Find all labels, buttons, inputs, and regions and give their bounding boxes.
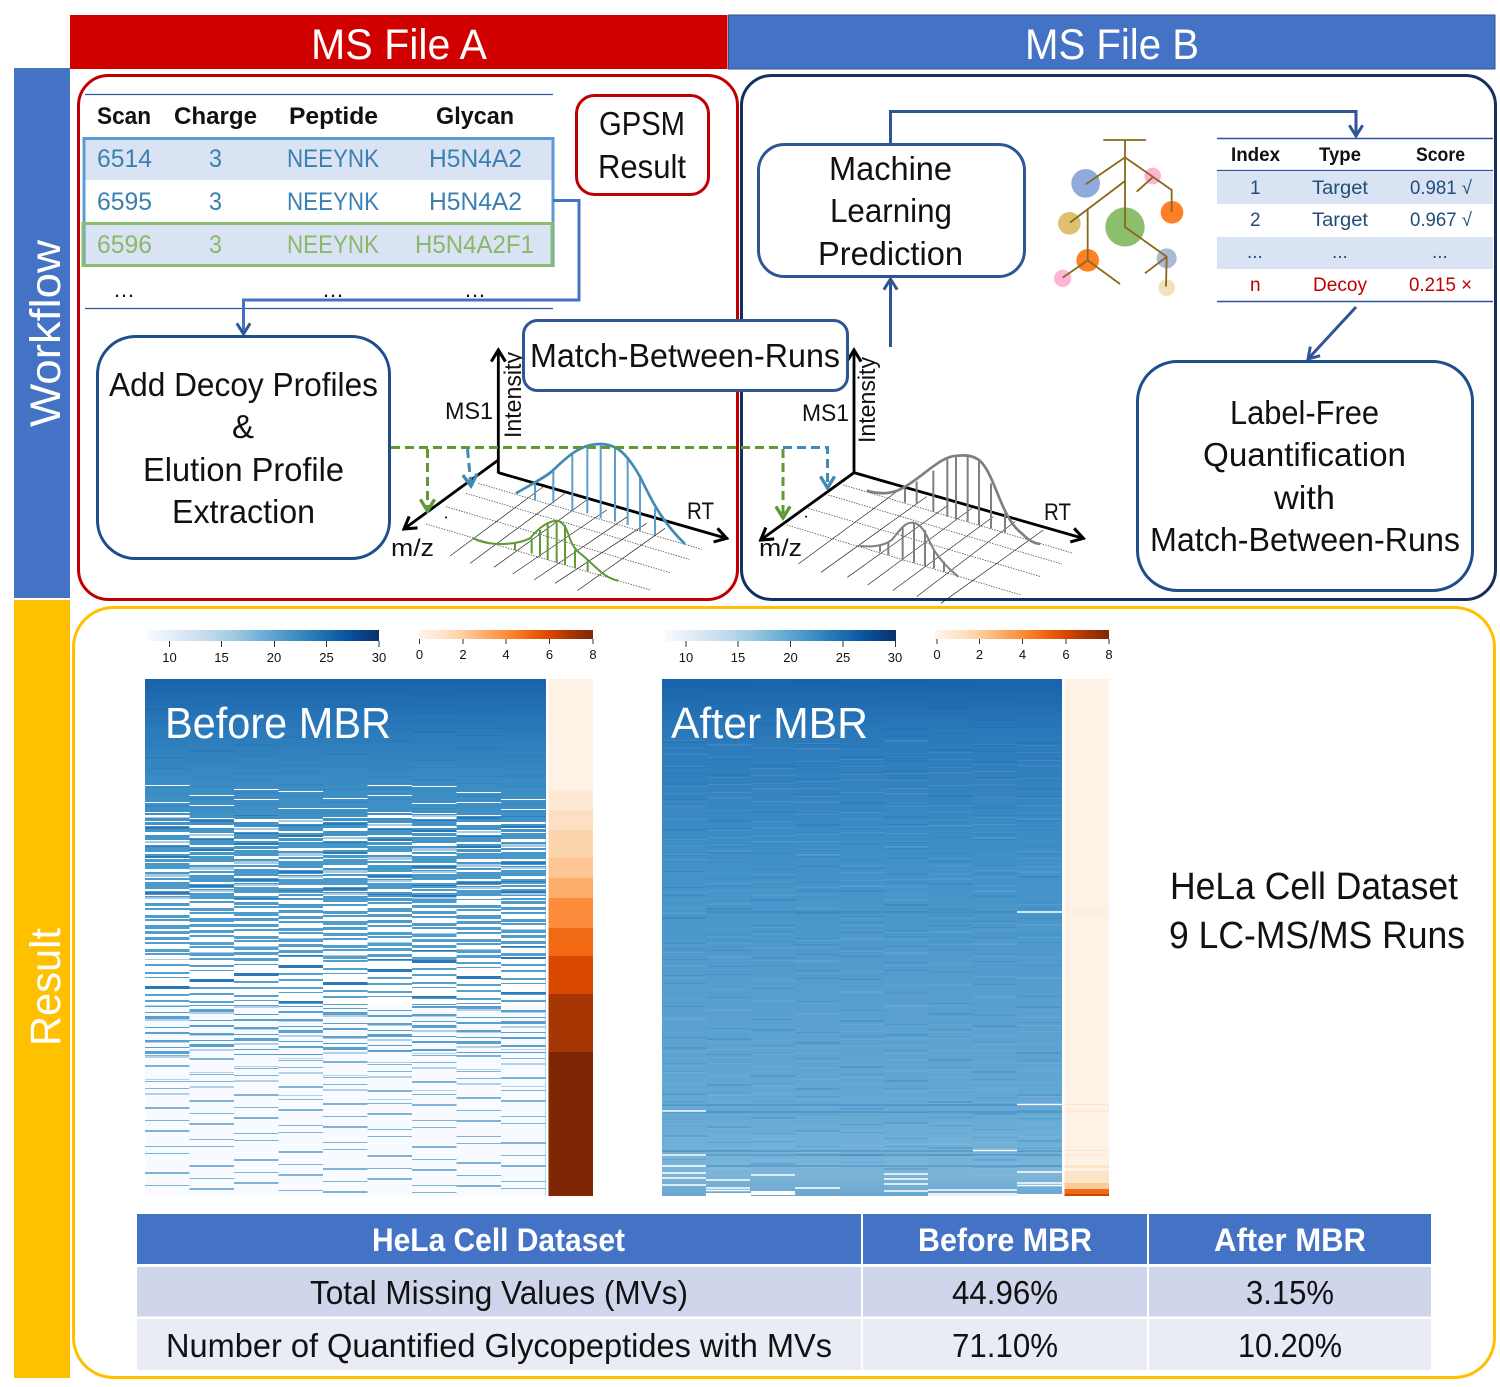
score table xyxy=(1217,138,1493,302)
colorbar: intensity before MBR: 15 xyxy=(214,650,229,665)
heatmap: after MBR: After MBR xyxy=(671,699,868,748)
chart: MS1 3D elution profile in file B xyxy=(759,350,1083,603)
colorbar: intensity after MBR: 15 xyxy=(731,650,745,665)
GPSM result box xyxy=(576,96,708,194)
colorbar: intensity before MBR: 30 xyxy=(372,650,386,665)
chart: MS1 3D elution profile in file A: RT xyxy=(687,498,714,525)
Machine Learning Prediction box xyxy=(758,144,1024,276)
score table: n xyxy=(1250,275,1261,296)
score table: Target xyxy=(1312,178,1369,199)
icon: decision tree xyxy=(1054,140,1183,296)
GPSM table: ... xyxy=(465,277,485,302)
GPSM table: NEEYNK xyxy=(287,231,379,259)
panel: MS File B workflow xyxy=(742,76,1496,600)
GPSM table: H5N4A2 xyxy=(429,145,522,173)
heatmap: after MBR xyxy=(662,679,1062,1196)
sidebar: Workflow xyxy=(14,68,70,598)
Add Decoy Profiles box xyxy=(98,336,390,558)
results table: HeLa Cell Dataset xyxy=(372,1222,625,1258)
colorbar: missing values after MBR: 8 xyxy=(1105,647,1113,662)
chart: MS1 3D elution profile in file B: MS1 xyxy=(802,400,849,427)
colorbar: missing values before MBR: 4 xyxy=(502,647,510,662)
Label-Free Quantification box: Match-Between-Runs xyxy=(1150,521,1460,558)
colorbar: intensity before MBR xyxy=(148,630,386,665)
GPSM table: ... xyxy=(323,277,343,302)
chart: MS1 3D elution profile in file A xyxy=(391,350,727,591)
colorbar: intensity after MBR xyxy=(665,630,902,665)
Machine Learning Prediction box: Prediction xyxy=(818,235,963,272)
colorbar: missing values before MBR: 6 xyxy=(546,647,553,662)
dataset label: 9 LC-MS/MS Runs xyxy=(1169,915,1465,957)
GPSM table: H5N4A2F1 xyxy=(415,231,534,259)
Label-Free Quantification box: Quantification xyxy=(1203,436,1406,473)
GPSM result box: Result xyxy=(598,148,686,185)
GPSM table: 3 xyxy=(209,188,222,216)
score table: Decoy xyxy=(1313,275,1367,296)
results table: Total Missing Values (MVs) xyxy=(310,1274,688,1311)
score table: Type xyxy=(1319,145,1361,166)
chart: MS1 3D elution profile in file A: m/z xyxy=(391,535,434,562)
chart: MS1 3D elution profile in file B: m/z xyxy=(759,535,802,562)
dataset label xyxy=(1169,866,1465,957)
Add Decoy Profiles box: Elution Profile xyxy=(143,451,344,488)
score table: 2 xyxy=(1250,210,1261,231)
colorbar: intensity before MBR: 20 xyxy=(267,650,281,665)
GPSM table: ... xyxy=(114,277,134,302)
missing value bar: after MBR xyxy=(1064,679,1109,1196)
score table: Target xyxy=(1312,210,1369,231)
GPSM table: 6596 xyxy=(97,231,152,259)
GPSM table: 6595 xyxy=(97,188,152,216)
score table: 0.215 × xyxy=(1409,275,1472,296)
Machine Learning Prediction box: Learning xyxy=(830,192,952,229)
colorbar: missing values before MBR: 2 xyxy=(459,647,467,662)
score table: 1 xyxy=(1250,178,1261,199)
Match-Between-Runs box xyxy=(524,320,848,390)
header: MS File A: MS File A xyxy=(311,21,487,69)
panel: result xyxy=(74,608,1494,1378)
GPSM table: Peptide xyxy=(289,103,378,130)
arrow: score table to quantification xyxy=(1308,307,1356,359)
missing value bar: before MBR xyxy=(548,679,593,1196)
colorbar: missing values before MBR: 8 xyxy=(589,647,597,662)
GPSM table xyxy=(83,94,553,308)
chart: MS1 3D elution profile in file B: RT xyxy=(1044,499,1071,526)
GPSM table: NEEYNK xyxy=(287,188,379,216)
header: MS File A xyxy=(70,15,728,69)
colorbar: missing values after MBR: 2 xyxy=(976,647,983,662)
results table: 10.20% xyxy=(1238,1327,1342,1364)
colorbar: intensity after MBR: 20 xyxy=(783,650,798,665)
score table: ... xyxy=(1247,242,1263,263)
header: MS File B xyxy=(728,15,1495,69)
Label-Free Quantification box xyxy=(1138,362,1472,590)
arrow: MS1 to machine learning xyxy=(889,279,892,347)
Match-Between-Runs box: Match-Between-Runs xyxy=(530,337,840,374)
score table: Index xyxy=(1231,145,1280,166)
colorbar: missing values after MBR: 0 xyxy=(933,647,941,662)
results table xyxy=(137,1214,1431,1370)
score table: Score xyxy=(1416,145,1465,166)
arrow: machine learning to score table xyxy=(890,112,1356,144)
dataset label: HeLa Cell Dataset xyxy=(1170,866,1458,908)
colorbar: intensity before MBR: 25 xyxy=(319,650,334,665)
GPSM table: 3 xyxy=(209,145,222,173)
colorbar: intensity after MBR: 10 xyxy=(679,650,693,665)
Add Decoy Profiles box: Add Decoy Profiles xyxy=(109,366,378,403)
colorbar: missing values after MBR: 4 xyxy=(1019,647,1026,662)
colorbar: intensity after MBR: 30 xyxy=(888,650,902,665)
chart: MS1 3D elution profile in file A: MS1 xyxy=(445,398,493,425)
GPSM table: Glycan xyxy=(436,103,514,130)
results table: Number of Quantified Glycopeptides with MVs xyxy=(166,1327,832,1364)
colorbar: missing values after MBR: 6 xyxy=(1062,647,1070,662)
sidebar: Result: Result xyxy=(22,928,70,1046)
panel: MS File A workflow xyxy=(78,76,738,600)
heatmap: before MBR xyxy=(145,679,546,1196)
colorbar: intensity after MBR: 25 xyxy=(836,650,850,665)
score table: ... xyxy=(1432,242,1448,263)
header: MS File B: MS File B xyxy=(1025,21,1199,69)
results table: After MBR xyxy=(1214,1222,1366,1258)
Machine Learning Prediction box: Machine xyxy=(829,150,952,187)
colorbar: missing values after MBR xyxy=(933,630,1113,662)
chart: MS1 3D elution profile in file A: Intensity xyxy=(500,352,527,438)
score table: ... xyxy=(1332,242,1348,263)
GPSM table: H5N4A2 xyxy=(429,188,522,216)
GPSM table: Scan xyxy=(97,103,151,130)
score table: 0.967 √ xyxy=(1410,210,1473,231)
Label-Free Quantification box: with xyxy=(1273,479,1335,516)
sidebar: Workflow: Workflow xyxy=(22,239,70,427)
results table: Before MBR xyxy=(918,1222,1092,1258)
results table: 71.10% xyxy=(952,1327,1058,1364)
GPSM table: Charge xyxy=(174,103,257,130)
colorbar: intensity before MBR: 10 xyxy=(162,650,177,665)
GPSM table: NEEYNK xyxy=(287,145,379,173)
arrow: table to decoy profile box xyxy=(244,200,579,334)
heatmap: before MBR: Before MBR xyxy=(165,699,391,748)
GPSM table: 6514 xyxy=(97,145,152,173)
Label-Free Quantification box: Label-Free xyxy=(1230,394,1379,431)
GPSM table: 3 xyxy=(209,231,222,259)
Add Decoy Profiles box: & xyxy=(232,408,254,445)
colorbar: missing values before MBR xyxy=(416,630,597,662)
sidebar: Result xyxy=(14,600,70,1378)
Add Decoy Profiles box: Extraction xyxy=(172,493,315,530)
results table: 3.15% xyxy=(1246,1274,1334,1311)
GPSM result box: GPSM xyxy=(599,105,685,142)
results table: 44.96% xyxy=(952,1274,1058,1311)
colorbar: missing values before MBR: 0 xyxy=(416,647,423,662)
chart: MS1 3D elution profile in file B: Intensity xyxy=(854,357,881,443)
dashed guides: peak m/z lines across both files xyxy=(391,448,828,518)
score table: 0.981 √ xyxy=(1410,178,1473,199)
